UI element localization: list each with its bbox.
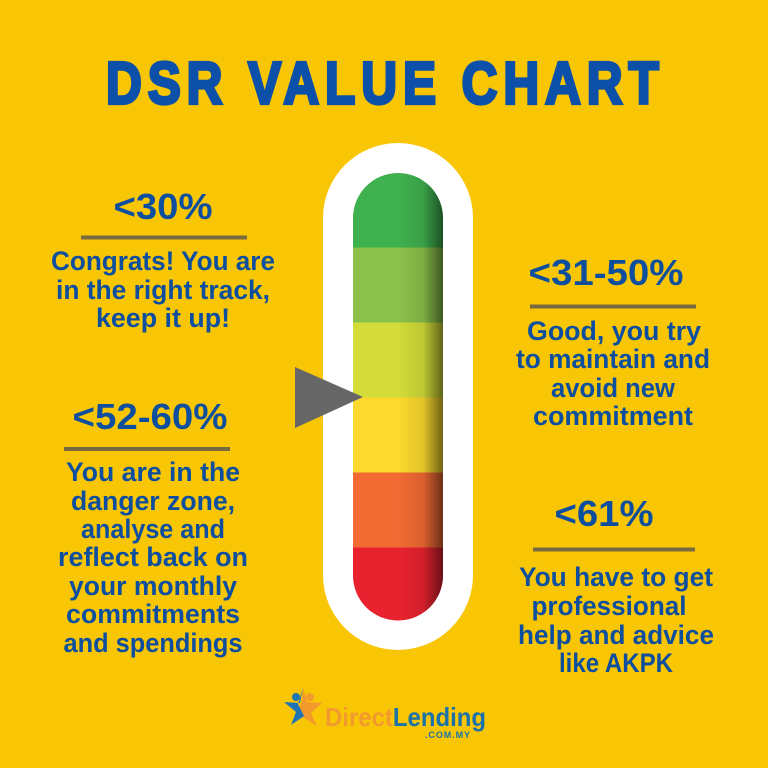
description: keep it up! <box>96 303 230 333</box>
logo: DirectLending <box>284 688 486 740</box>
description: Congrats! You are <box>51 246 275 276</box>
logo domain: .COM.MY <box>425 730 470 740</box>
value heading: <31-50% <box>528 252 684 293</box>
description: commitment <box>533 401 693 431</box>
description <box>516 316 710 431</box>
description: You are in the <box>66 457 240 487</box>
description <box>58 457 248 658</box>
description: analyse and <box>81 514 225 544</box>
description: commitments <box>66 599 240 629</box>
description: reflect back on <box>58 542 248 572</box>
description: in the right track, <box>56 275 270 305</box>
panel: 52-60% <box>58 396 248 658</box>
title: DSR VALUE CHART <box>106 50 659 116</box>
description: danger zone, <box>71 486 235 516</box>
logo wordmark: DirectLending <box>325 702 486 732</box>
description: and spendings <box>64 628 242 658</box>
description: your monthly <box>69 571 237 601</box>
description: like AKPK <box>559 648 673 678</box>
panel: under 30% <box>51 186 275 333</box>
divider <box>533 548 695 552</box>
divider <box>81 236 247 240</box>
description: avoid new <box>551 373 676 403</box>
pointer arrow <box>295 367 363 428</box>
panel: 31-50% <box>516 252 710 431</box>
description: professional <box>532 591 686 621</box>
description: You have to get <box>519 562 713 592</box>
description <box>51 246 275 333</box>
description: to maintain and <box>516 344 710 374</box>
description <box>518 562 714 678</box>
value heading: <30% <box>114 186 212 227</box>
gauge: thermometer scale <box>323 143 473 650</box>
divider <box>64 447 230 451</box>
icon: star with figures <box>284 688 322 726</box>
panel: over 61% <box>518 493 714 678</box>
description: Good, you try <box>527 316 701 346</box>
divider <box>530 304 696 308</box>
value heading: <61% <box>554 493 654 534</box>
value heading: <52-60% <box>72 396 228 437</box>
gauge colour bands <box>353 173 443 620</box>
description: help and advice <box>518 620 714 650</box>
gauge white casing <box>323 143 473 650</box>
